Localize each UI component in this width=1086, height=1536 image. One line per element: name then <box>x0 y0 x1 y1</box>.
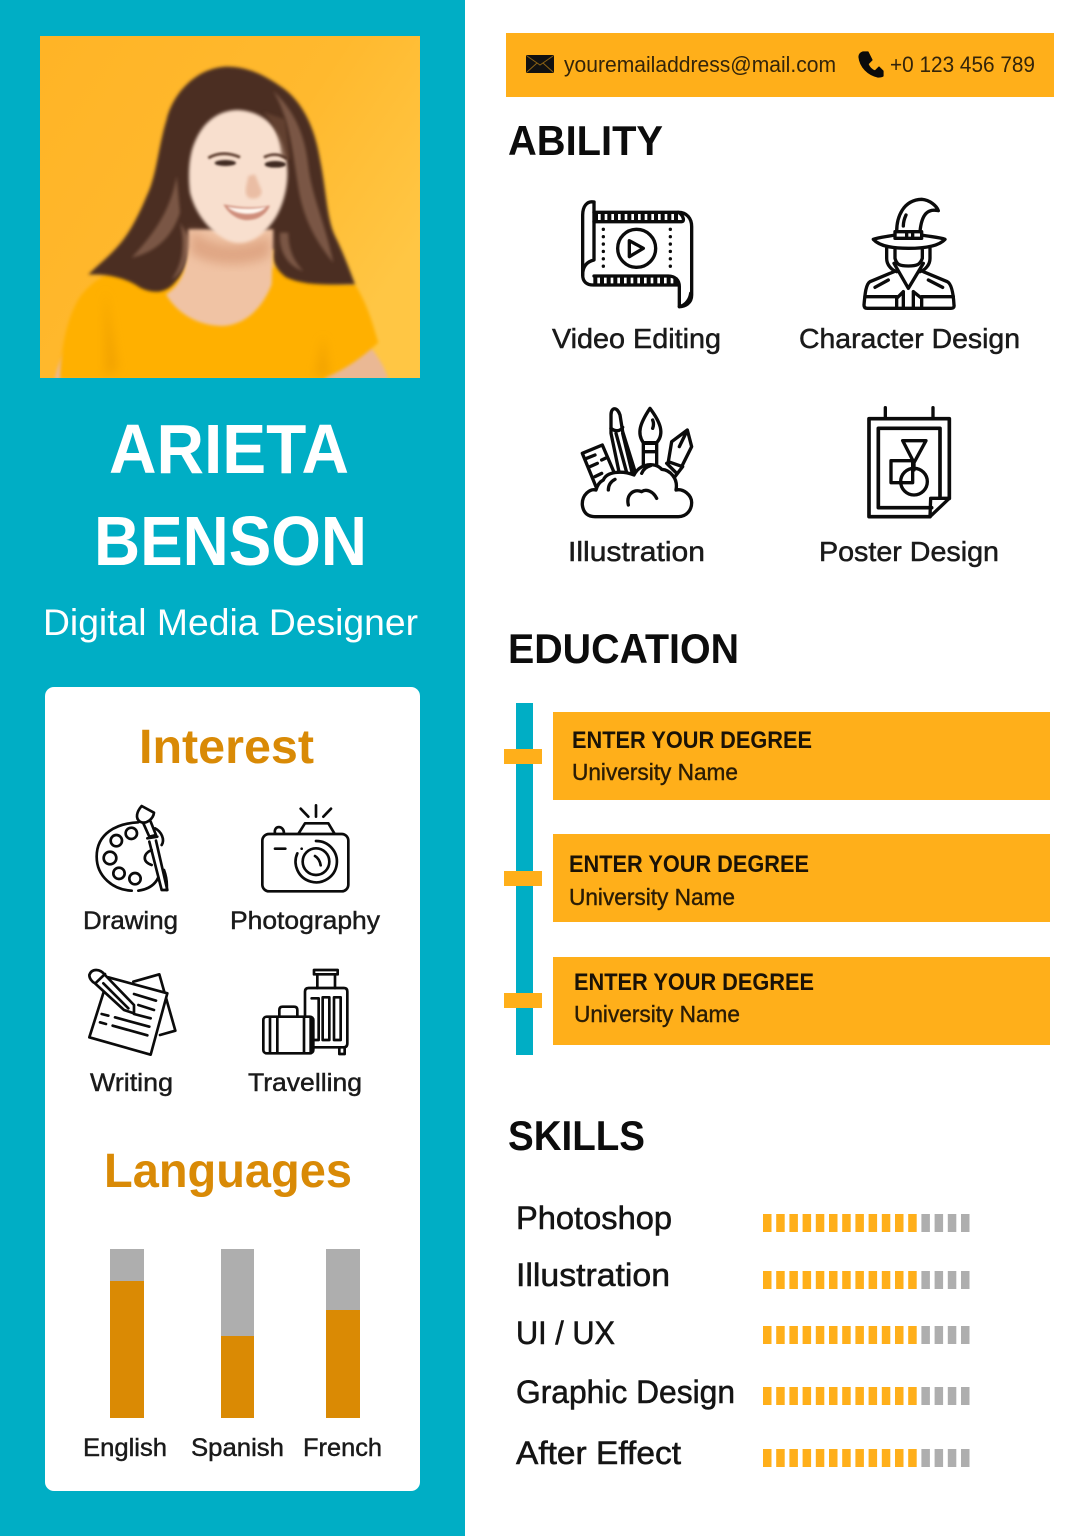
education entry 2: ENTER YOUR DEGREE <box>569 851 809 878</box>
icon: poster design <box>869 408 949 517</box>
bar chart: languages <box>83 1249 382 1462</box>
email: youremailaddress@mail.com <box>564 52 836 77</box>
education entry 3: ENTER YOUR DEGREE <box>574 969 814 996</box>
bar chart: languages: French <box>303 1434 382 1462</box>
timeline <box>504 703 542 1055</box>
bar chart: languages: English <box>83 1434 167 1462</box>
skill: After Effect <box>516 1435 970 1471</box>
icon: character design <box>864 199 954 308</box>
panel: interest and languages card <box>45 687 420 1491</box>
icon: camera <box>262 805 348 891</box>
skill: UI / UX: UI / UX <box>516 1315 615 1351</box>
skill: Photoshop: Photoshop <box>516 1200 672 1236</box>
icon: video editing <box>583 202 692 307</box>
skill: UI / UX <box>516 1315 970 1351</box>
name: BENSON <box>94 502 367 580</box>
icon: palette <box>97 806 167 891</box>
phone number: +0 123 456 789 <box>890 52 1035 77</box>
job title: Digital Media Designer <box>43 602 418 643</box>
icon: envelope <box>526 55 554 73</box>
icon: illustration tools <box>582 408 692 517</box>
label: Drawing: Drawing <box>83 907 178 935</box>
skill: Graphic Design <box>516 1374 970 1410</box>
portrait photo <box>40 36 420 379</box>
icon: luggage <box>263 970 347 1054</box>
label: Character Design: Character Design <box>799 323 1020 354</box>
label: Video Editing: Video Editing <box>552 323 721 354</box>
label: Photography: Photography <box>230 907 381 935</box>
education entry 2 <box>553 834 1050 922</box>
label: Poster Design: Poster Design <box>819 536 999 567</box>
heading: Skills: SKILLS <box>508 1112 645 1159</box>
education entry 2: University Name <box>569 884 735 910</box>
label: Writing: Writing <box>90 1069 173 1097</box>
skill: Illustration: Illustration <box>516 1257 670 1293</box>
name <box>94 410 367 580</box>
education entry 1 <box>553 712 1050 800</box>
heading: Languages: Languages <box>104 1145 352 1198</box>
icon: phone <box>859 52 883 77</box>
skill: After Effect: After Effect <box>516 1435 681 1471</box>
education entry 1: University Name <box>572 759 738 785</box>
education entry 3: University Name <box>574 1001 740 1027</box>
education entry 1: ENTER YOUR DEGREE <box>572 727 812 754</box>
name: ARIETA <box>109 410 349 488</box>
skill: Graphic Design: Graphic Design <box>516 1374 735 1410</box>
bar chart: languages: Spanish <box>191 1434 284 1462</box>
heading: Education: EDUCATION <box>508 625 739 672</box>
label: Illustration: Illustration <box>568 536 705 567</box>
heading: Interest: Interest <box>139 721 314 774</box>
skill: Illustration <box>516 1257 970 1293</box>
skill: Photoshop <box>516 1200 970 1236</box>
panel: left sidebar <box>0 0 465 1536</box>
icon: writing <box>89 970 175 1055</box>
label: Travelling: Travelling <box>248 1069 362 1097</box>
heading: Ability: ABILITY <box>508 117 663 164</box>
education entry 3 <box>553 957 1050 1045</box>
contact bar <box>506 33 1054 97</box>
